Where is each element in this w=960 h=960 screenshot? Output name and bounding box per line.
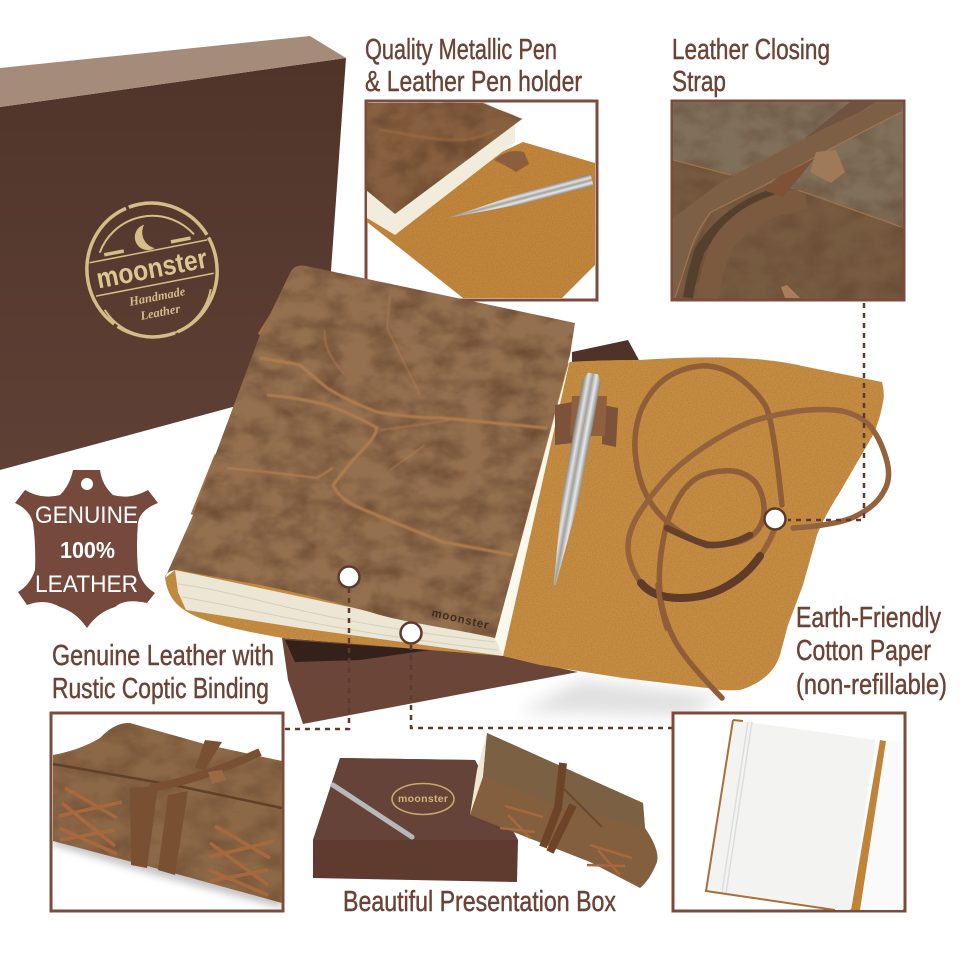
marker dots and dashed leader lines (283, 303, 864, 729)
genuine leather badge (15, 470, 158, 628)
central box base (282, 340, 640, 724)
heading: strap (672, 34, 830, 98)
binding laces (193, 308, 277, 515)
moonster gold logo: Leather (138, 301, 181, 323)
genuine leather badge: LEATHER (35, 571, 138, 598)
heading: cotton paper (796, 602, 947, 701)
photo panel: cotton paper (673, 713, 905, 911)
pen holder and pen (546, 372, 618, 587)
journal cover: moonster (430, 607, 490, 632)
journal pages (175, 355, 571, 656)
leather strap loops (628, 366, 889, 698)
photo panel: pen and holder (366, 101, 597, 300)
heading: binding: Rustic Coptic Binding (52, 673, 269, 705)
genuine leather badge: GENUINE (35, 502, 138, 529)
heading: binding: Genuine Leather with (52, 640, 274, 672)
moonster gold logo (75, 192, 229, 348)
heading: strap: Strap (672, 66, 726, 98)
heading: pen (365, 34, 582, 98)
heading: pen: & Leather Pen holder (365, 66, 582, 98)
caption: presentation box: Beautiful Presentation Box (343, 886, 616, 918)
soft shadow under journal (520, 680, 720, 716)
moonster gold logo: moonster (94, 243, 210, 294)
journal cover (160, 260, 580, 645)
presentation box lid (0, 36, 346, 470)
journal open flap (160, 350, 890, 695)
box and journal photo (313, 733, 658, 888)
photo panel: coptic binding (51, 713, 283, 911)
heading: strap: Leather Closing (672, 34, 830, 66)
heading: binding (52, 640, 274, 705)
heading: pen: Quality Metallic Pen (365, 34, 557, 66)
box and journal photo: moonster (398, 793, 448, 805)
moonster gold logo: Handmade (127, 284, 187, 309)
photo panel: closing strap (672, 101, 904, 300)
genuine leather badge: 100% (60, 537, 115, 563)
